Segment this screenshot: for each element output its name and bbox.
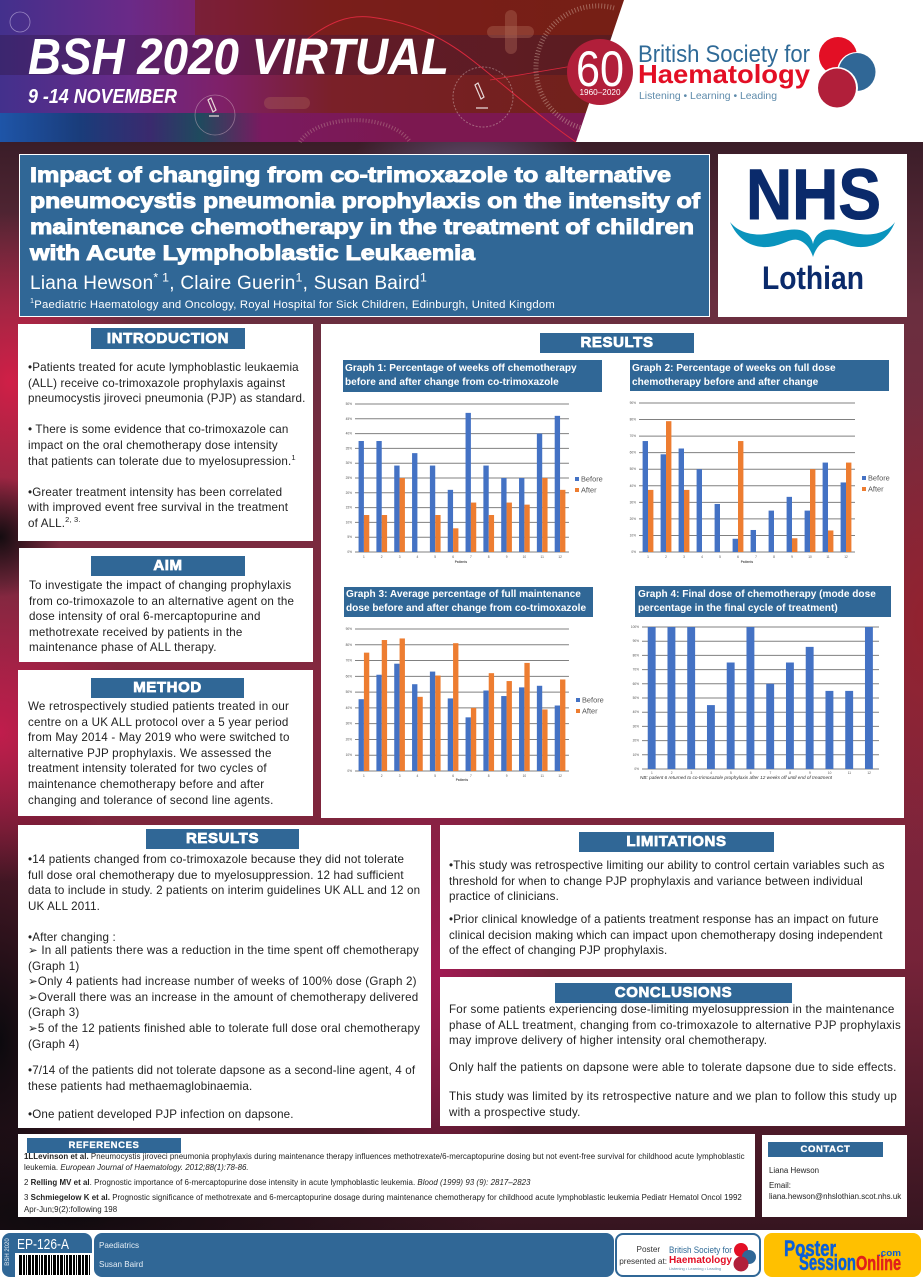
- panel: method: [18, 670, 313, 816]
- bar chart: graph 4: 8: [789, 771, 791, 775]
- text: dapsone conclusion: Only half the patients on dapsone were able to tolerate dapsone due to side effects.: [449, 1061, 897, 1074]
- bar chart: graph 3: 6: [452, 774, 454, 778]
- presented at text: [619, 1245, 667, 1266]
- main conference title: [28, 28, 449, 108]
- bar chart: graph 1: 0%: [347, 550, 352, 554]
- bar chart: graph 2: 60%: [630, 451, 636, 455]
- panel: introduction: [18, 324, 313, 541]
- bar chart: graph 4: 10%: [633, 753, 639, 757]
- bar chart: graph 2: 50%: [630, 467, 636, 471]
- text: reference 3: 3 Schmiegelow K et al. Prognostic significance of methotrexate and 6-mercaptopurine dosage during maintenance chemotherapy for childhood acute lymphoblastic leukemia Pediatr Hematol Oncol 1992: [24, 1193, 742, 1202]
- heading: references: REFERENCES: [69, 1140, 139, 1151]
- bar chart: graph 3: 0%: [347, 769, 352, 773]
- bar chart: graph 4: 2: [671, 771, 673, 775]
- bar chart: graph 1: 7: [470, 555, 472, 559]
- text: after changing list: [28, 944, 420, 1051]
- bar chart: graph 4: 6: [750, 771, 752, 775]
- bar chart: graph 4: 40%: [633, 710, 639, 714]
- British Society for Haematology logo: 1960–2020: [580, 88, 621, 97]
- vertical label: BSH 2020: [5, 1238, 11, 1266]
- text: contact details: liana.hewson@nhslothian.scot.nhs.uk: [769, 1192, 901, 1201]
- bar chart: graph 2: 1: [647, 555, 649, 559]
- text: PJP infection: •One patient developed PJP infection on dapsone.: [28, 1108, 294, 1121]
- bar chart: graph 2: 7: [755, 555, 757, 559]
- bar chart: graph 2: 70%: [630, 434, 636, 438]
- bar chart: graph 4: 3: [691, 771, 693, 775]
- heading: study title: with Acute Lymphoblastic Leukaemia: [29, 242, 475, 265]
- British Society for Haematology logo: [567, 37, 876, 108]
- text: introduction: of ALL.2, 3.: [28, 515, 81, 530]
- bar chart: graph 3: Patients: [456, 778, 468, 782]
- mini logo: Haematology: [669, 1254, 732, 1266]
- bar chart: graph 2: 0%: [631, 550, 636, 554]
- bar chart: graph 4: 5: [730, 771, 732, 775]
- text: reference 2: 2 Relling MV et al. Prognostic importance of 6-mercaptopurine dose intensity in acute lymphoblastic leukemia. Blood (1999) 93 (9): 2817–2823: [24, 1178, 530, 1187]
- bar chart: graph 3: 9: [506, 774, 508, 778]
- text: after changing list: (Graph 3): [28, 1006, 79, 1019]
- bar chart: graph 4: 80%: [633, 653, 639, 657]
- graph 2 title: [630, 360, 889, 391]
- text: introduction: [28, 361, 306, 530]
- text: method: treatment intensity tolerated for two cycles of: [28, 762, 267, 775]
- text: contact details: Email:: [769, 1181, 791, 1190]
- bar chart: graph 1: 25%: [346, 476, 352, 480]
- bar chart: graph 1: 5%: [347, 535, 352, 539]
- panel: aim: [19, 548, 313, 662]
- text: reference 1: [24, 1152, 745, 1172]
- bar chart: graph 3: 3: [399, 774, 401, 778]
- bar chart: graph 2: 4: [701, 555, 703, 559]
- heading: contact: [768, 1142, 883, 1157]
- bar chart: graph 1: Before: [581, 474, 603, 484]
- bar chart: graph 2: 90%: [630, 401, 636, 405]
- text: dapsone: these patients had methaemaglobinaemia.: [28, 1080, 252, 1093]
- text: dapsone: •7/14 of the patients did not tolerate dapsone as a second-line agent, 4 of: [28, 1064, 415, 1077]
- British Society for Haematology logo: 60: [576, 41, 624, 97]
- bar chart: graph 1: 10: [523, 555, 526, 559]
- text: introduction: •Patients treated for acute lymphoblastic leukaemia: [28, 361, 299, 374]
- text: reference 3: [24, 1193, 742, 1214]
- bar chart: graph 4: 90%: [633, 639, 639, 643]
- text: after changing list: ➢ In all patients there was a reduction in the time spent off chemotherapy: [28, 944, 419, 957]
- graph 4 title: Graph 4: Final dose of chemotherapy (mode dose: [638, 589, 876, 600]
- graph 4 title: percentage in the final cycle of treatment): [638, 603, 838, 614]
- text: patients changed: •14 patients changed from co-trimoxazole because they did not tolerate: [28, 853, 404, 866]
- text: aim: dose intensity of oral 6-mercaptopurine and: [29, 610, 261, 623]
- author: Susan Baird: [99, 1260, 143, 1269]
- main conference title: BSH 2020 VIRTUAL: [28, 28, 449, 85]
- bar chart: graph 4: [631, 625, 879, 780]
- presented at text: presented at:: [619, 1256, 667, 1266]
- heading: introduction: INTRODUCTION: [107, 330, 229, 347]
- bar chart: graph 1: Patients: [455, 560, 467, 564]
- footer: poster session online logo: .com: [878, 1248, 901, 1258]
- bar chart: graph 1: After: [581, 486, 597, 494]
- footer: poster session online logo: Poster: [784, 1236, 836, 1261]
- text: introduction: • There is some evidence that co-trimoxazole can: [28, 423, 288, 436]
- panel: NHS Lothian logo: NHS: [746, 156, 881, 235]
- bar chart: graph 4: 9: [809, 771, 811, 775]
- heading: results: RESULTS: [580, 334, 654, 351]
- bar chart: graph 2: 40%: [630, 484, 636, 488]
- text: reference 1: leukemia. European Journal of Haematology. 2012;88(1):78-86.: [24, 1162, 249, 1172]
- bar chart: graph 3: 8: [488, 774, 490, 778]
- text: contact details: Liana Hewson: [769, 1166, 819, 1175]
- bar chart: graph 4: 0%: [634, 767, 639, 771]
- text: limits conclusion: This study was limited by its retrospective nature and we plan to follow this study up: [449, 1090, 897, 1103]
- text: limitations second point: of the effect of changing PJP prophylaxis.: [449, 944, 667, 957]
- footer: poster presented at: [615, 1233, 761, 1277]
- bar chart: graph 1: 50%: [346, 402, 352, 406]
- bar chart: graph 3: 30%: [346, 722, 352, 726]
- text: method: maintenance chemotherapy before and after: [28, 778, 264, 791]
- bar chart: graph 3: 12: [558, 774, 562, 778]
- text: limitations second point: •Prior clinical knowledge of a patients treatment response has an impact on future: [449, 913, 879, 926]
- text: introduction: (ALL) receive co-trimoxazole prophylaxis against: [28, 377, 285, 390]
- bar chart: graph 3: Before: [582, 696, 604, 704]
- text: introduction: that patients can tolerate due to myelosupression.1: [28, 453, 296, 468]
- bar chart: graph 2: 80%: [630, 418, 636, 422]
- bar chart: graph 1: 8: [488, 555, 490, 559]
- bar chart: graph 2: 6: [737, 555, 739, 559]
- text: aim: To investigate the impact of changing prophylaxis: [29, 579, 291, 592]
- header banner: [0, 0, 624, 143]
- bar chart: graph 1: 45%: [346, 417, 352, 421]
- graph 3 title: dose before and after change from co-trimoxazole: [346, 603, 586, 614]
- bar chart: graph 1: [346, 402, 603, 564]
- heading: contact: CONTACT: [801, 1144, 850, 1155]
- bar chart: graph 1: 2: [381, 555, 383, 559]
- text: conclusions: phase of ALL treatment, changing from co-trimoxazole to alternative PJP prophylaxis: [449, 1019, 901, 1032]
- text: patients changed: [28, 853, 420, 944]
- footer: poster session online logo: [764, 1233, 921, 1277]
- heading: study title: Impact of changing from co-trimoxazole to alternative: [30, 164, 671, 187]
- bar chart: graph 3: 40%: [346, 706, 352, 710]
- graph 3 title: Graph 3: Average percentage of full maintenance: [346, 589, 581, 600]
- bar chart: graph 1: 10%: [346, 520, 352, 524]
- text: after changing list: ➢Only 4 patients had increase number of weeks of 100% dose (Graph 2): [28, 975, 417, 988]
- text: patients changed: UK ALL 2011.: [28, 900, 100, 913]
- bar chart: graph 4: 100%: [631, 625, 639, 629]
- text: patients changed: data to include in study. 2 patients on interim guidelines UK ALL and 12 on: [28, 884, 420, 897]
- text: after changing list: ➢5 of the 12 patients finished able to tolerate full dose oral chemotherapy: [28, 1022, 420, 1035]
- session: Paediatrics: [99, 1241, 139, 1250]
- bar chart: graph 1: 12: [558, 555, 562, 559]
- text: limitations second point: [449, 913, 883, 957]
- heading: limitations: LIMITATIONS: [626, 833, 727, 850]
- heading: study title: maintenance chemotherapy in the treatment of children: [30, 216, 694, 239]
- text: introduction: •Greater treatment intensity has been correlated: [28, 486, 282, 499]
- graph 4 title: [635, 586, 891, 617]
- text: limits conclusion: [449, 1090, 897, 1119]
- bar chart: graph 2: [630, 401, 890, 564]
- footer: poster session online logo: Online: [856, 1253, 901, 1275]
- bar chart: graph 2: 2: [665, 555, 667, 559]
- bar chart: graph 4: 30%: [633, 724, 639, 728]
- bar chart: graph 4: 11: [848, 771, 851, 775]
- panel: results graphs: [321, 324, 904, 818]
- panel: poster title: [19, 154, 710, 317]
- bar chart: graph 4: 70%: [633, 668, 639, 672]
- graph 2 title: Graph 2: Percentage of weeks on full dose: [632, 363, 836, 374]
- bar chart: graph 1: 11: [541, 555, 544, 559]
- bar chart: graph 3: 70%: [346, 659, 352, 663]
- text: contact details: [769, 1166, 902, 1201]
- bar chart: graph 1: 20%: [346, 491, 352, 495]
- text: limits conclusion: with a prospective study.: [449, 1106, 581, 1119]
- bar chart: graph 3: 80%: [346, 643, 352, 647]
- bar chart: graph 4: NB: patient 6 returned to co-trimoxazole prophylaxis after 12 weeks off until end of treatment: [640, 775, 833, 780]
- main conference title: 9 -14 NOVEMBER: [28, 86, 177, 108]
- heading: references: [27, 1138, 181, 1153]
- panel: references: [18, 1134, 755, 1217]
- mini logo: Listening • Learning • Leading: [669, 1266, 721, 1271]
- bar chart: graph 3: 4: [417, 774, 419, 778]
- bar chart: graph 1: 1: [363, 555, 365, 559]
- presented at text: Poster: [636, 1245, 660, 1254]
- graph 1 title: before and after change from co-trimoxazole: [345, 377, 559, 388]
- bar chart: graph 3: 11: [541, 774, 544, 778]
- bar chart: graph 2: 10: [808, 555, 812, 559]
- text: method: changing and tolerance of second line agents.: [28, 794, 274, 807]
- bar chart: graph 2: 3: [683, 555, 685, 559]
- text: after changing list: (Graph 4): [28, 1038, 79, 1051]
- bar chart: graph 2: Before: [868, 474, 890, 482]
- heading: results text: [146, 829, 299, 849]
- text: dapsone: [28, 1064, 416, 1093]
- bar chart: graph 3: 1: [363, 774, 365, 778]
- heading: limitations: [579, 832, 774, 852]
- bar chart: graph 2: 8: [773, 555, 775, 559]
- bar chart: graph 1: 3: [399, 555, 401, 559]
- text: reference 1: 1LLevinson et al. Pneumocystis jiroveci pneumonia prophylaxis during maintenance therapy influences methotrexate/6-mercaptopurine dosing but not event-free survival for childhood acute lymphoblastic: [24, 1152, 745, 1161]
- heading: results text: RESULTS: [186, 830, 259, 847]
- panel: conclusions: [440, 977, 905, 1126]
- bar chart: graph 2: After: [868, 484, 884, 494]
- text: method: centre on a UK ALL protocol over a 5 year period: [28, 716, 289, 729]
- text: limitations: threshold for when to change PJP prophylaxis and variance between individual: [449, 875, 863, 888]
- text: aim: from co-trimoxazole to an alternative agent on the: [29, 595, 294, 608]
- heading: results: [540, 333, 694, 353]
- text: introduction: with improved event free survival in the treatment: [28, 501, 288, 514]
- bar chart: graph 1: 35%: [346, 446, 352, 450]
- heading: study title: [29, 164, 701, 265]
- British Society for Haematology logo: Haematology: [638, 59, 811, 89]
- text: limitations second point: clinical decision making which can impact upon chemotherapy dosing independent: [449, 929, 883, 942]
- bar chart: graph 2: 20%: [630, 517, 636, 521]
- bar chart: graph 1: 5: [434, 555, 436, 559]
- bar chart: graph 3: 60%: [346, 674, 352, 678]
- bar chart: graph 3: 20%: [346, 737, 352, 741]
- British Society for Haematology logo: Listening • Learning • Leading: [639, 90, 777, 102]
- bar chart: graph 4: 7: [770, 771, 772, 775]
- graph 3 title: [344, 587, 593, 617]
- poster id: EP-126-A: [17, 1236, 69, 1253]
- bar chart: graph 3: 50%: [346, 690, 352, 694]
- bar chart: graph 2: Patients: [741, 560, 753, 564]
- panel: NHS Lothian logo: Lothian: [762, 260, 864, 296]
- text: introduction: impact on the oral chemotherapy dose intensity: [28, 439, 278, 452]
- footer: poster id tab: [2, 1233, 92, 1277]
- panel: limitations: [440, 825, 905, 969]
- graph 1 title: [343, 360, 602, 392]
- text: aim: maintenance phase of ALL therapy.: [29, 641, 217, 654]
- authors: Liana Hewson* 1, Claire Guerin1, Susan Baird1: [30, 271, 427, 294]
- footer: poster session online logo: Session: [799, 1250, 856, 1275]
- bar chart: graph 1: 15%: [346, 506, 352, 510]
- bar chart: graph 4: 20%: [633, 739, 639, 743]
- bar chart: graph 3: 7: [470, 774, 472, 778]
- text: conclusions: may improve delivery of higher intensity oral chemotherapy.: [449, 1034, 767, 1047]
- bar chart: graph 1: 40%: [346, 432, 352, 436]
- panel: NHS Lothian logo: [718, 154, 907, 317]
- mini logo: British Society for: [669, 1245, 732, 1256]
- text: limitations: [449, 859, 884, 903]
- heading: method: [91, 678, 244, 698]
- graph 2 title: chemotherapy before and after change: [632, 377, 818, 388]
- bar chart: graph 2: 11: [826, 555, 830, 559]
- bar chart: graph 2: 10%: [630, 533, 636, 537]
- bar chart: graph 3: [346, 627, 604, 782]
- text: method: [28, 700, 290, 807]
- bar chart: graph 2: 5: [719, 555, 721, 559]
- bar chart: graph 4: 60%: [633, 682, 639, 686]
- text: conclusions: [449, 1003, 901, 1047]
- bar chart: graph 4: 4: [710, 771, 712, 775]
- text: after changing list: (Graph 1): [28, 960, 79, 973]
- British Society for Haematology logo: British Society for: [638, 41, 810, 68]
- bar chart: graph 2: 30%: [630, 500, 636, 504]
- bar chart: graph 3: 2: [381, 774, 383, 778]
- panel: contact: [762, 1135, 907, 1217]
- bar chart: graph 3: 10%: [346, 753, 352, 757]
- text: patients changed: •After changing :: [28, 931, 116, 944]
- text: patients changed: full dose oral chemotherapy due to myelosuppression. 12 had sufficient: [28, 869, 404, 882]
- text: method: from May 2014 - May 2019 who were switched to: [28, 731, 290, 744]
- barcode: [15, 1253, 92, 1277]
- bar chart: graph 2: 9: [791, 555, 793, 559]
- graph 1 title: Graph 1: Percentage of weeks off chemotherapy: [345, 363, 577, 374]
- text: after changing list: ➢Overall there was an increase in the amount of chemotherapy delivered: [28, 991, 418, 1004]
- text: method: alternative PJP prophylaxis. We assessed the: [28, 747, 272, 760]
- text: introduction: pneumocystis jiroveci pneumonia (PJP) as standard.: [28, 392, 306, 405]
- bar chart: graph 4: 10: [828, 771, 832, 775]
- mini logo: [669, 1243, 756, 1272]
- affiliation: 1Paediatric Haematology and Oncology, Royal Hospital for Sick Children, Edinburgh, United Kingdom: [30, 296, 555, 311]
- bar chart: graph 1: 30%: [346, 461, 352, 465]
- bar chart: graph 4: 50%: [633, 696, 639, 700]
- heading: study title: pneumocystis pneumonia prophylaxis on the intensity of: [30, 190, 701, 213]
- heading: aim: AIM: [153, 557, 183, 574]
- text: conclusions: For some patients experiencing dose-limiting myelosuppression in the maintenance: [449, 1003, 895, 1016]
- bar chart: graph 4: 1: [651, 771, 653, 775]
- bar chart: graph 2: 12: [844, 555, 848, 559]
- bar chart: graph 1: 9: [506, 555, 508, 559]
- bar chart: graph 3: 90%: [346, 627, 352, 631]
- heading: conclusions: CONCLUSIONS: [615, 984, 732, 1001]
- text: aim: [29, 579, 294, 654]
- footer: session and author bar: [94, 1233, 614, 1277]
- heading: method: METHOD: [133, 679, 202, 696]
- bar chart: graph 1: 6: [452, 555, 454, 559]
- text: limitations: practice of clinicians.: [449, 890, 559, 903]
- panel: results text: [18, 825, 431, 1128]
- text: reference 3: Apr-Jun;9(2):following 198: [24, 1205, 117, 1214]
- text: limitations: •This study was retrospective limiting our ability to control certain variables such as: [449, 859, 884, 872]
- heading: introduction: [91, 328, 245, 349]
- text: aim: methotrexate received by patients in the: [29, 626, 243, 639]
- bar chart: graph 3: 5: [434, 774, 436, 778]
- bar chart: graph 3: After: [582, 706, 598, 716]
- text: method: We retrospectively studied patients treated in our: [28, 700, 289, 713]
- heading: aim: [91, 556, 245, 576]
- bar chart: graph 3: 10: [523, 774, 526, 778]
- heading: conclusions: [555, 983, 792, 1003]
- bar chart: graph 4: 12: [867, 771, 871, 775]
- bar chart: graph 1: 4: [417, 555, 419, 559]
